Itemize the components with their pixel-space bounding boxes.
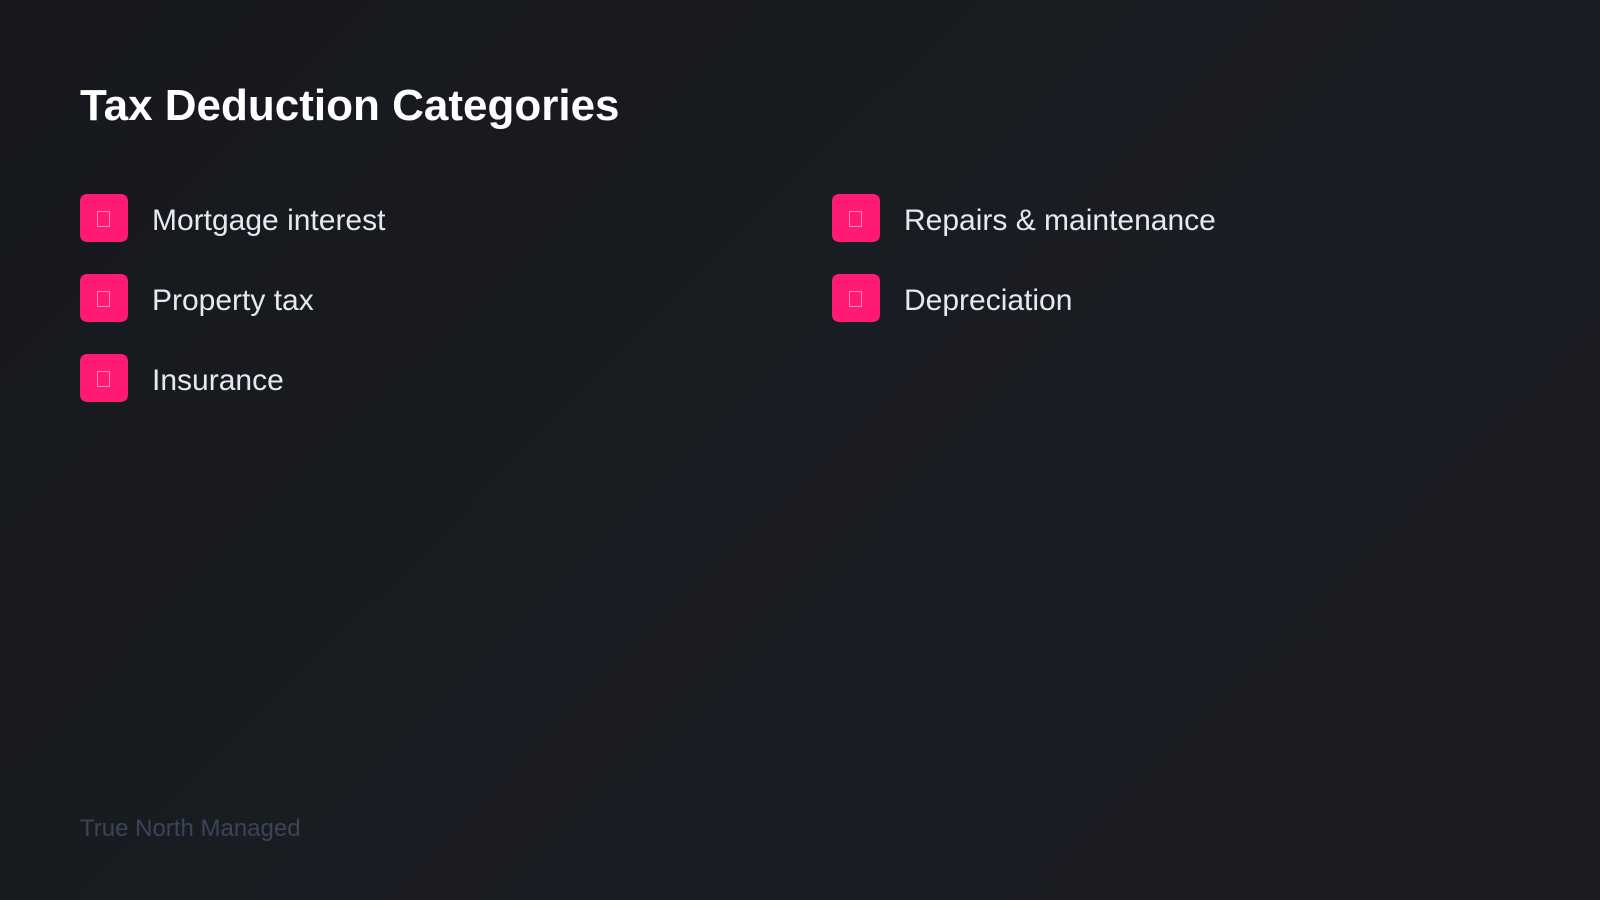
item: insurance: Insurance xyxy=(152,364,284,397)
item: repairs & maintenance xyxy=(832,194,1216,242)
item: property tax xyxy=(80,274,314,322)
item: mortgage interest: Mortgage interest xyxy=(152,204,385,237)
footer: True North Managed xyxy=(80,815,301,842)
item: mortgage interest xyxy=(80,194,386,242)
item: insurance xyxy=(80,354,284,402)
item: depreciation xyxy=(832,274,1072,322)
item: repairs & maintenance: Repairs & maintenance xyxy=(904,204,1216,237)
item: depreciation: Depreciation xyxy=(904,284,1072,317)
title: Tax Deduction Categories xyxy=(80,81,620,130)
item: property tax: Property tax xyxy=(152,284,314,317)
